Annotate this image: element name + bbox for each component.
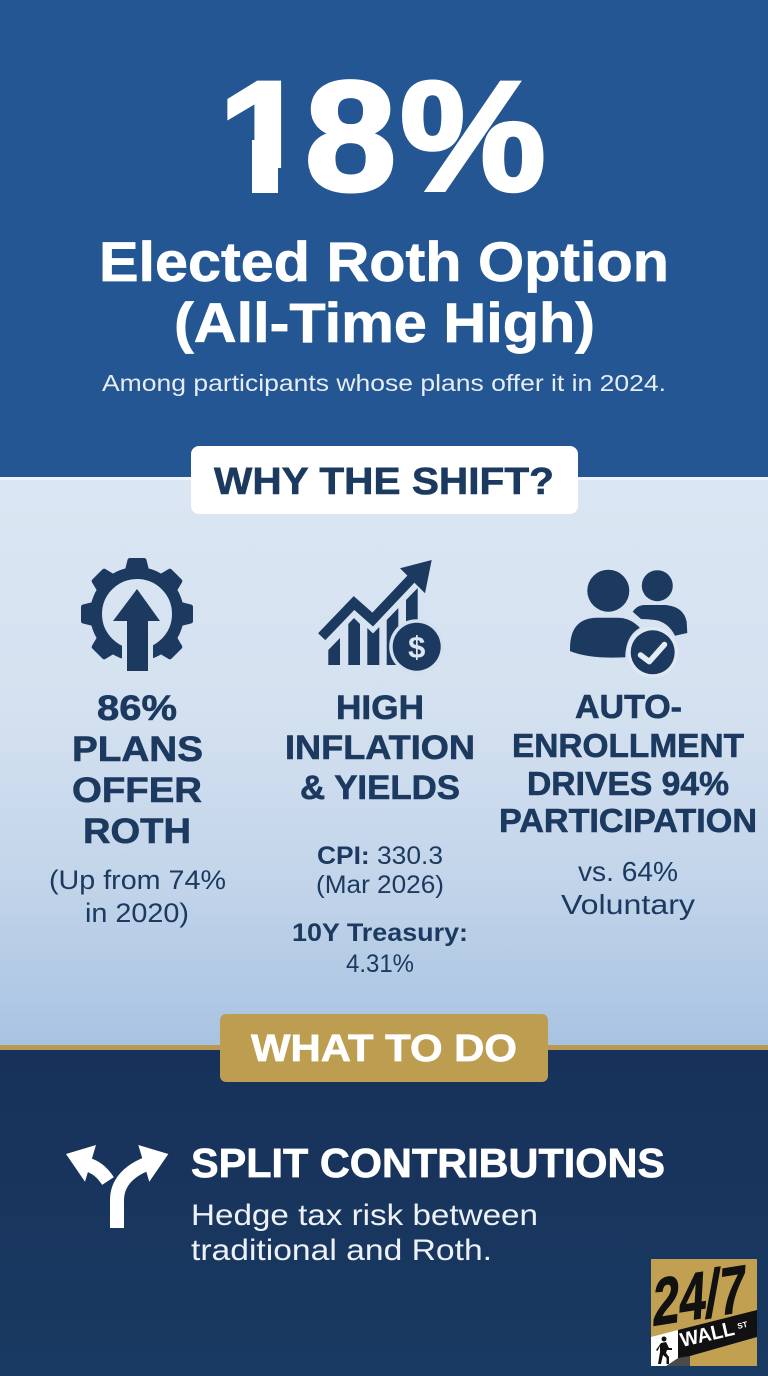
heading: auto-enrollment drives 94% participation: AUTO- — [575, 688, 682, 725]
note: up from 74% in 2020: (Up from 74% — [49, 865, 226, 895]
note: vs 64% voluntary: vs. 64% — [578, 856, 678, 887]
column: plans offer Roth — [49, 558, 226, 928]
data: 10Y Treasury — [292, 919, 468, 978]
text: hedge tax risk — [191, 1199, 538, 1267]
data: 10Y Treasury: 10Y Treasury: — [292, 919, 468, 947]
stat label: 86% plans offer Roth — [72, 689, 203, 851]
heading: auto-enrollment drives 94% participation: DRIVES 94% — [527, 765, 729, 802]
text: hedge tax risk: Hedge tax risk between — [191, 1199, 538, 1232]
big number 18%: 18% — [218, 49, 546, 223]
icon: rising chart with dollar coin — [322, 560, 444, 674]
badge: why the shift: WHY THE SHIFT? — [214, 461, 554, 503]
heading: high inflation and yields — [285, 689, 475, 807]
note: up from 74% in 2020: in 2020) — [85, 898, 189, 928]
heading: high inflation and yields: & YIELDS — [300, 769, 460, 807]
heading: high inflation and yields: HIGH — [336, 689, 424, 727]
heading: elected Roth option: Elected Roth Option — [99, 230, 669, 293]
heading: auto-enrollment drives 94% participation — [499, 688, 757, 839]
heading: high inflation and yields: INFLATION — [285, 729, 475, 767]
note: vs 64% voluntary — [561, 856, 695, 920]
note: up from 74% in 2020 — [49, 865, 226, 928]
column: high inflation and yields — [285, 560, 475, 978]
logo: 24/7 Wall St — [651, 1252, 757, 1366]
icon: two people with check mark — [569, 570, 687, 678]
badge: what to do: WHAT TO DO — [251, 1028, 517, 1070]
stat label: 86% plans offer Roth: ROTH — [83, 812, 191, 851]
panel: what to do — [0, 1014, 768, 1376]
data: CPI: CPI: 330.3 — [317, 842, 443, 870]
panel: headline stat — [0, 0, 768, 478]
logo: 24/7 Wall St: WALL — [678, 1318, 737, 1352]
heading: auto-enrollment drives 94% participation: PARTICIPATION — [499, 802, 757, 839]
data: CPI — [316, 842, 444, 899]
badge: what to do — [220, 1014, 548, 1082]
logo: 24/7 Wall St: ST — [736, 1320, 749, 1331]
text: hedge tax risk: traditional and Roth. — [191, 1234, 492, 1267]
data: 10Y Treasury: 4.31% — [346, 950, 414, 978]
stat label: 86% plans offer Roth: 86% — [97, 689, 177, 728]
badge: why the shift — [191, 446, 578, 514]
icon: gear with up arrow — [81, 558, 193, 672]
icon: splitting arrows — [66, 1145, 168, 1228]
note: vs 64% voluntary: Voluntary — [561, 889, 695, 920]
panel: why the shift — [0, 446, 768, 1046]
heading: elected Roth option — [99, 230, 669, 354]
heading: split contributions: SPLIT CONTRIBUTIONS — [191, 1140, 665, 1186]
stat label: 86% plans offer Roth: OFFER — [72, 771, 202, 810]
heading: elected Roth option: (All-Time High) — [174, 291, 595, 354]
subheading text: Among participants whose plans offer it in 2024. — [102, 370, 666, 396]
icon: rising chart with dollar coin: $ — [408, 630, 425, 664]
stat label: 86% plans offer Roth: PLANS — [72, 730, 203, 769]
heading: auto-enrollment drives 94% participation: ENROLLMENT — [512, 727, 744, 764]
data: CPI: (Mar 2026) — [316, 871, 444, 899]
column: auto-enrollment — [499, 570, 757, 920]
